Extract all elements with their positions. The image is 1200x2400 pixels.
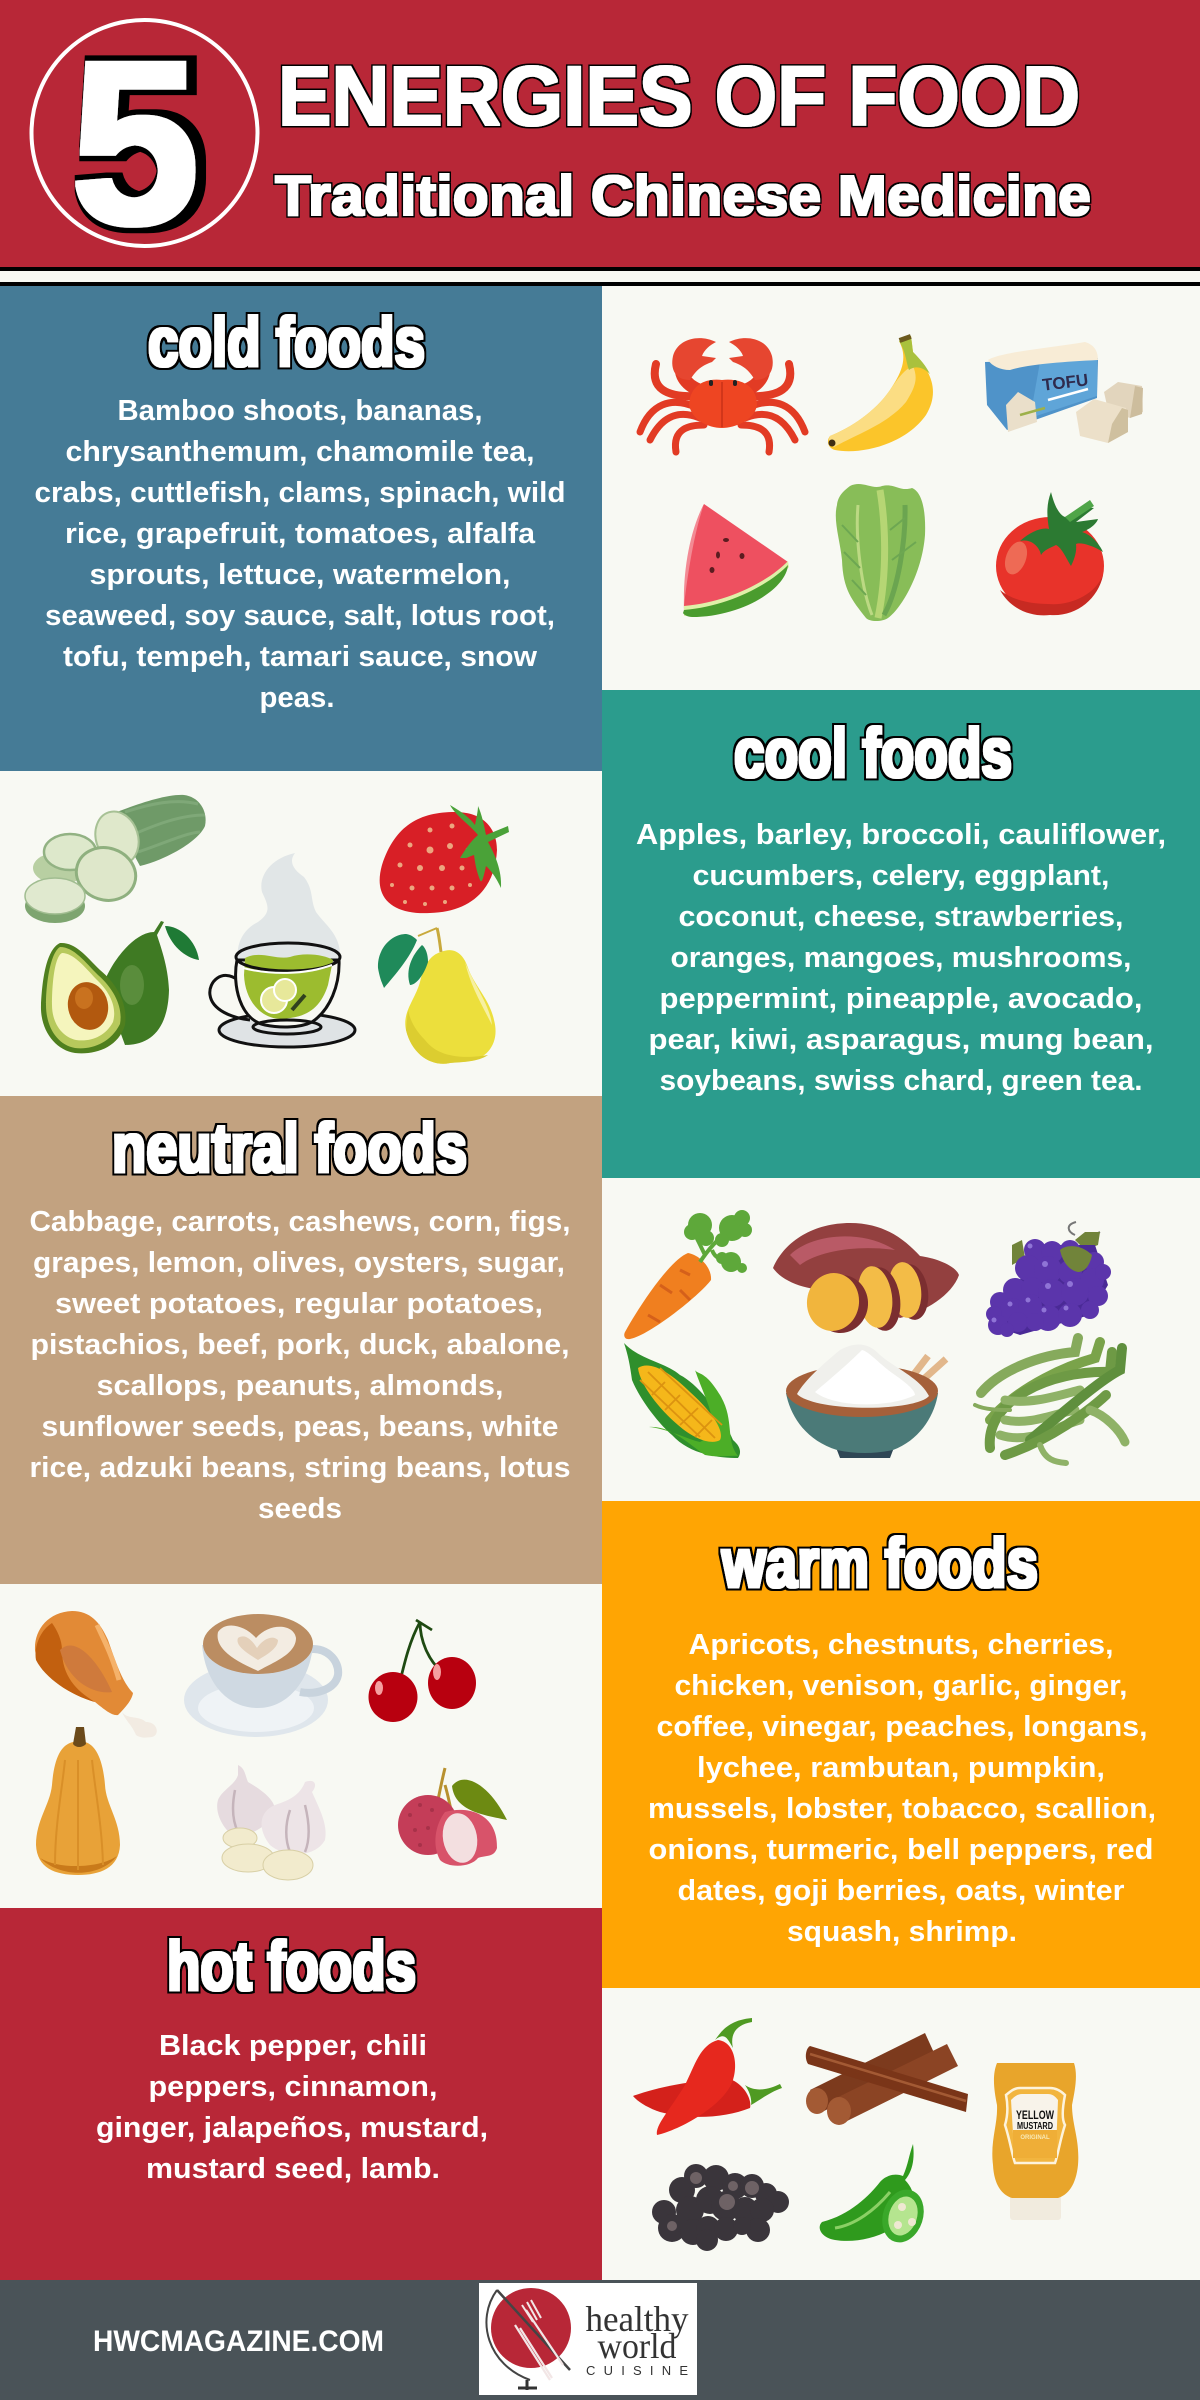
- text: neutral foods list: scallops, peanuts, almonds,: [96, 1370, 504, 1402]
- text: warm foods list: onions, turmeric, bell peppers, red: [648, 1834, 1154, 1866]
- text: warm foods list: [648, 1629, 1156, 1948]
- footer website text: HWCMAGAZINE.COM: [93, 2325, 384, 2358]
- text: warm foods list: mussels, lobster, tobacco, scallion,: [648, 1793, 1156, 1825]
- icon: sweet potato: [773, 1223, 959, 1336]
- icon: cinnamon sticks: [806, 2033, 968, 2125]
- icon: corn: [624, 1343, 740, 1458]
- heading: cold foods: cold foods: [148, 303, 425, 381]
- text: cold foods list: peas.: [260, 682, 334, 714]
- icon: tomato: [996, 492, 1104, 615]
- icon: green tea: [210, 853, 355, 1047]
- text: cold foods list: crabs, cuttlefish, clams, spinach, wild: [34, 477, 566, 509]
- number badge: 5: [32, 14, 258, 273]
- logo: healthy world cuisine: CUISINE: [586, 2363, 688, 2378]
- icon: cherries: [368, 1620, 476, 1722]
- text: cold foods list: chrysanthemum, chamomile tea,: [66, 436, 534, 468]
- icon: mustard bottle: MUSTARD: [1017, 2121, 1053, 2132]
- text: hot foods list: [96, 2030, 488, 2185]
- subtitle: Traditional Chinese Medicine: [275, 164, 1091, 228]
- text: neutral foods list: [30, 1206, 570, 1525]
- icon: rice bowl: [786, 1345, 946, 1458]
- label: TOFU: TOFU: [1041, 370, 1089, 395]
- icon: mustard bottle: ORIGINAL: [1020, 2135, 1050, 2141]
- panel: hot food illustrations: [633, 2018, 1078, 2251]
- text: hot foods list: Black pepper, chili: [159, 2030, 427, 2062]
- text: cool foods list: Apples, barley, broccoli, cauliflower,: [636, 819, 1166, 851]
- icon: lettuce: [836, 484, 925, 621]
- text: cold foods list: seaweed, soy sauce, salt, lotus root,: [45, 600, 555, 632]
- panel: warm food illustrations: [35, 1611, 507, 1880]
- text: warm foods list: coffee, vinegar, peaches, longans,: [656, 1711, 1148, 1743]
- text: cool foods list: [636, 819, 1166, 1097]
- title: ENERGIES OF FOOD: [278, 49, 1080, 143]
- icon: crab: [640, 338, 805, 452]
- icon: chicken drumstick: [35, 1611, 157, 1738]
- text: neutral foods list: sweet potatoes, regular potatoes,: [55, 1288, 543, 1320]
- icon: coffee cup: [184, 1614, 338, 1737]
- icon: carrot: [624, 1210, 752, 1339]
- text: cool foods list: oranges, mangoes, mushrooms,: [670, 942, 1132, 974]
- footer bar: [0, 2280, 1200, 2400]
- logo wordmark: healthy: [586, 2299, 688, 2339]
- panel: hot foods: [0, 1908, 602, 2280]
- icon: pear: [378, 928, 496, 1064]
- text: warm foods list: squash, shrimp.: [787, 1916, 1017, 1948]
- icon: watermelon: [683, 504, 789, 617]
- icon: tofu: [985, 342, 1143, 443]
- panel: cold food illustrations: [640, 334, 1143, 621]
- text: neutral foods list: Cabbage, carrots, cashews, corn, figs,: [30, 1206, 570, 1238]
- icon: mustard bottle: [992, 2063, 1078, 2220]
- heading: cool foods: cool foods: [734, 714, 1012, 792]
- text: cold foods list: [34, 395, 566, 714]
- icon: cucumber: [25, 795, 206, 923]
- text: cool foods list: soybeans, swiss chard, green tea.: [660, 1065, 1142, 1097]
- panel: warm foods: [602, 1501, 1200, 1988]
- number badge: 5: 5: [70, 14, 200, 273]
- text: hot foods list: ginger, jalapeños, mustard,: [96, 2112, 488, 2144]
- text: cool foods list: pear, kiwi, asparagus, mung bean,: [648, 1024, 1154, 1056]
- panel: cool foods: [602, 690, 1200, 1178]
- text: cold foods list: rice, grapefruit, tomatoes, alfalfa: [65, 518, 536, 550]
- text: hot foods list: peppers, cinnamon,: [148, 2071, 438, 2103]
- text: cool foods list: coconut, cheese, strawberries,: [678, 901, 1124, 933]
- panel: neutral food illustrations: [624, 1210, 1125, 1463]
- icon: lychee: [398, 1768, 507, 1866]
- icon: black peppercorns: [652, 2164, 789, 2251]
- icon: jalapeno: [820, 2144, 930, 2248]
- icon: banana: [828, 334, 933, 451]
- text: neutral foods list: sunflower seeds, peas, beans, white: [42, 1411, 558, 1443]
- icon: grapes: [986, 1222, 1111, 1337]
- icon: garlic: [217, 1765, 326, 1880]
- text: cool foods list: cucumbers, celery, eggplant,: [692, 860, 1110, 892]
- text: warm foods list: chicken, venison, garlic, ginger,: [674, 1670, 1128, 1702]
- text: hot foods list: mustard seed, lamb.: [146, 2153, 440, 2185]
- panel: cool food illustrations: [25, 795, 509, 1064]
- header banner: [0, 0, 1200, 286]
- text: cold foods list: Bamboo shoots, bananas,: [118, 395, 482, 427]
- text: neutral foods list: pistachios, beef, pork, duck, abalone,: [30, 1329, 570, 1361]
- text: warm foods list: dates, goji berries, oats, winter: [678, 1875, 1124, 1907]
- icon: avocado: [41, 921, 199, 1053]
- logo: healthy world cuisine: [479, 2283, 697, 2395]
- text: cold foods list: sprouts, lettuce, watermelon,: [90, 559, 510, 591]
- heading: warm foods: warm foods: [721, 1524, 1038, 1602]
- icon: butternut squash: [36, 1727, 120, 1875]
- icon: green beans: [975, 1338, 1125, 1463]
- heading: neutral foods: neutral foods: [112, 1109, 467, 1187]
- text: cold foods list: tofu, tempeh, tamari sauce, snow: [63, 641, 537, 673]
- heading: hot foods: hot foods: [167, 1927, 416, 2005]
- text: neutral foods list: seeds: [258, 1493, 342, 1525]
- text: warm foods list: lychee, rambutan, pumpkin,: [697, 1752, 1105, 1784]
- icon: strawberry: [380, 805, 509, 913]
- text: neutral foods list: grapes, lemon, olives, oysters, sugar,: [33, 1247, 565, 1279]
- logo: healthy world cuisine: world: [598, 2326, 676, 2366]
- label: yellow mustard: YELLOW: [1016, 2108, 1054, 2122]
- panel: neutral foods: [0, 1096, 602, 1584]
- icon: chili peppers: [633, 2018, 782, 2135]
- text: warm foods list: Apricots, chestnuts, cherries,: [688, 1629, 1114, 1661]
- text: cool foods list: peppermint, pineapple, avocado,: [660, 983, 1142, 1015]
- panel: cold foods: [0, 286, 602, 771]
- text: neutral foods list: rice, adzuki beans, string beans, lotus: [30, 1452, 570, 1484]
